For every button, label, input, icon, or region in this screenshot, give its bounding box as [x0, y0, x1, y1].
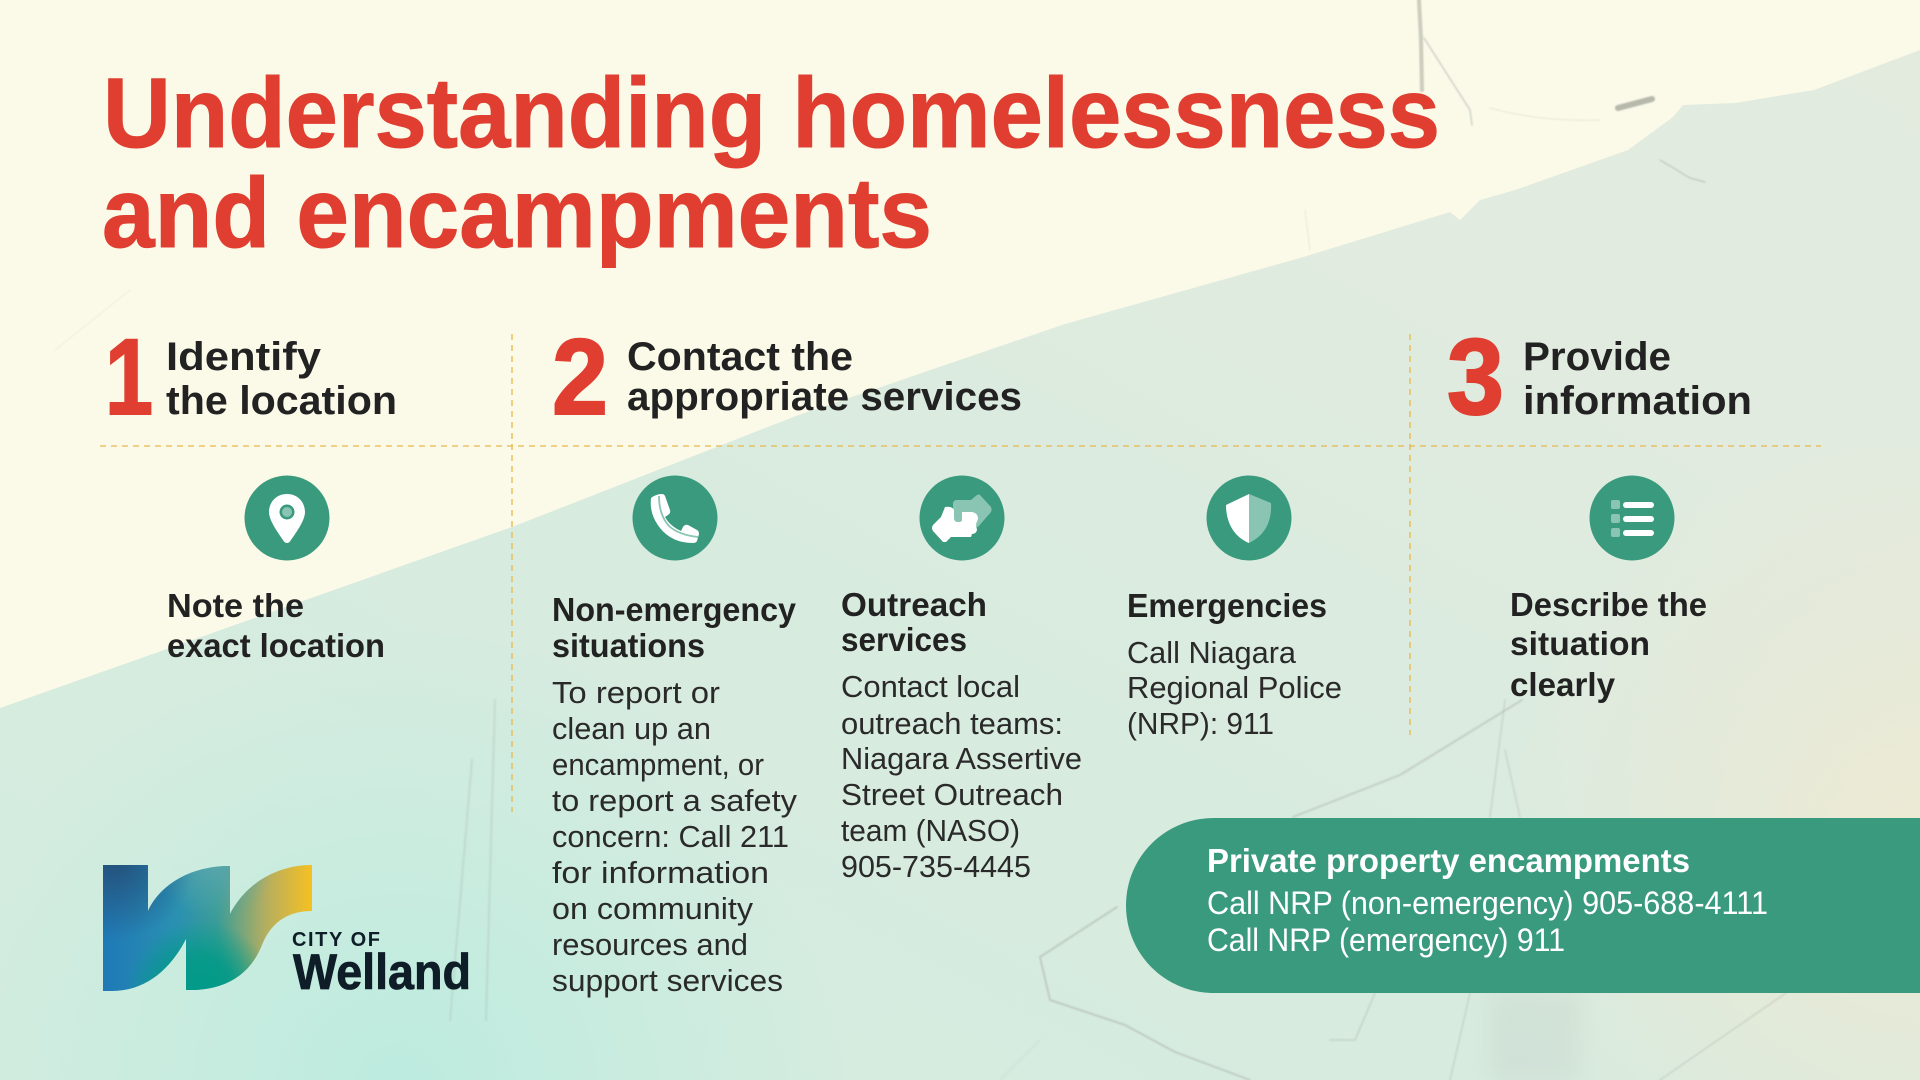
title: and encampments — [102, 157, 932, 268]
callout: private property encampments: Private property encampments — [1207, 842, 1690, 879]
step 2 heading: Contact the — [627, 335, 853, 379]
step 2 heading: 2 — [552, 316, 608, 437]
step 1 heading: the location — [166, 379, 397, 423]
column: outreach services: Contact local — [841, 669, 1020, 704]
icon: location pin — [244, 476, 330, 560]
column: non-emergency situations: resources and — [552, 927, 748, 962]
step 3 heading: Provide — [1523, 335, 1671, 379]
column: non-emergency situations: To report or — [552, 675, 720, 710]
step 2 heading: appropriate services — [627, 375, 1022, 419]
callout: private property encampments — [1126, 818, 1920, 993]
column: emergencies: Regional Police — [1127, 670, 1342, 705]
column: non-emergency situations: encampment, or — [552, 747, 764, 782]
column: non-emergency situations: to report a safety — [552, 783, 798, 818]
column: outreach services: 905-735-4445 — [841, 849, 1031, 884]
column: non-emergency situations — [552, 591, 798, 998]
text: describe the situation clearly: situation — [1510, 625, 1650, 662]
column: emergencies: (NRP): 911 — [1127, 706, 1274, 741]
column: non-emergency situations: clean up an — [552, 711, 711, 746]
text: describe the situation clearly — [1510, 586, 1707, 703]
step 1 heading: 1 — [105, 316, 153, 437]
column: outreach services: Street Outreach — [841, 777, 1063, 812]
column: non-emergency situations: on community — [552, 891, 754, 926]
title: Understanding homelessness — [103, 57, 1440, 168]
column: non-emergency situations: for information — [552, 855, 769, 890]
column: outreach services — [841, 586, 1082, 884]
text: note the exact location — [167, 587, 385, 664]
column: non-emergency situations: situations — [552, 627, 705, 664]
step 3 heading: information — [1523, 379, 1752, 423]
column: outreach services: services — [841, 621, 967, 658]
text: note the exact location: Note the — [167, 587, 304, 624]
logo: City of Welland — [103, 865, 471, 1000]
logo mark — [103, 865, 312, 991]
column: emergencies — [1127, 587, 1342, 741]
step 3 heading — [1447, 316, 1752, 437]
column: non-emergency situations: support services — [552, 963, 783, 998]
logo wordmark: Welland — [293, 944, 471, 1000]
column: outreach services: outreach teams: — [841, 706, 1063, 741]
column: non-emergency situations: Non-emergency — [552, 591, 797, 628]
text: note the exact location: exact location — [167, 627, 385, 664]
title — [102, 57, 1440, 268]
text: describe the situation clearly: clearly — [1510, 666, 1616, 703]
step 3 heading: 3 — [1447, 316, 1504, 437]
column: outreach services: team (NASO) — [841, 813, 1020, 848]
column: outreach services: Outreach — [841, 586, 987, 623]
text: describe the situation clearly: Describe the — [1510, 586, 1707, 623]
step 1 heading: Identify — [166, 335, 322, 379]
column: outreach services: Niagara Assertive — [841, 741, 1082, 776]
column: emergencies: Call Niagara — [1127, 635, 1297, 670]
callout: private property encampments: Call NRP (non-emergency) 905-688-4111 — [1207, 885, 1768, 921]
step 1 heading — [105, 316, 397, 437]
step 2 heading — [552, 316, 1022, 437]
icon: shield — [1206, 476, 1292, 560]
column: emergencies: Emergencies — [1127, 587, 1327, 624]
icon: list — [1590, 476, 1674, 560]
icon: phone — [632, 476, 718, 560]
callout: private property encampments: Call NRP (emergency) 911 — [1207, 922, 1565, 958]
column: non-emergency situations: concern: Call 211 — [552, 819, 789, 854]
icon: helping hands — [920, 476, 1004, 560]
logo wordmark: CITY OF — [292, 929, 380, 951]
